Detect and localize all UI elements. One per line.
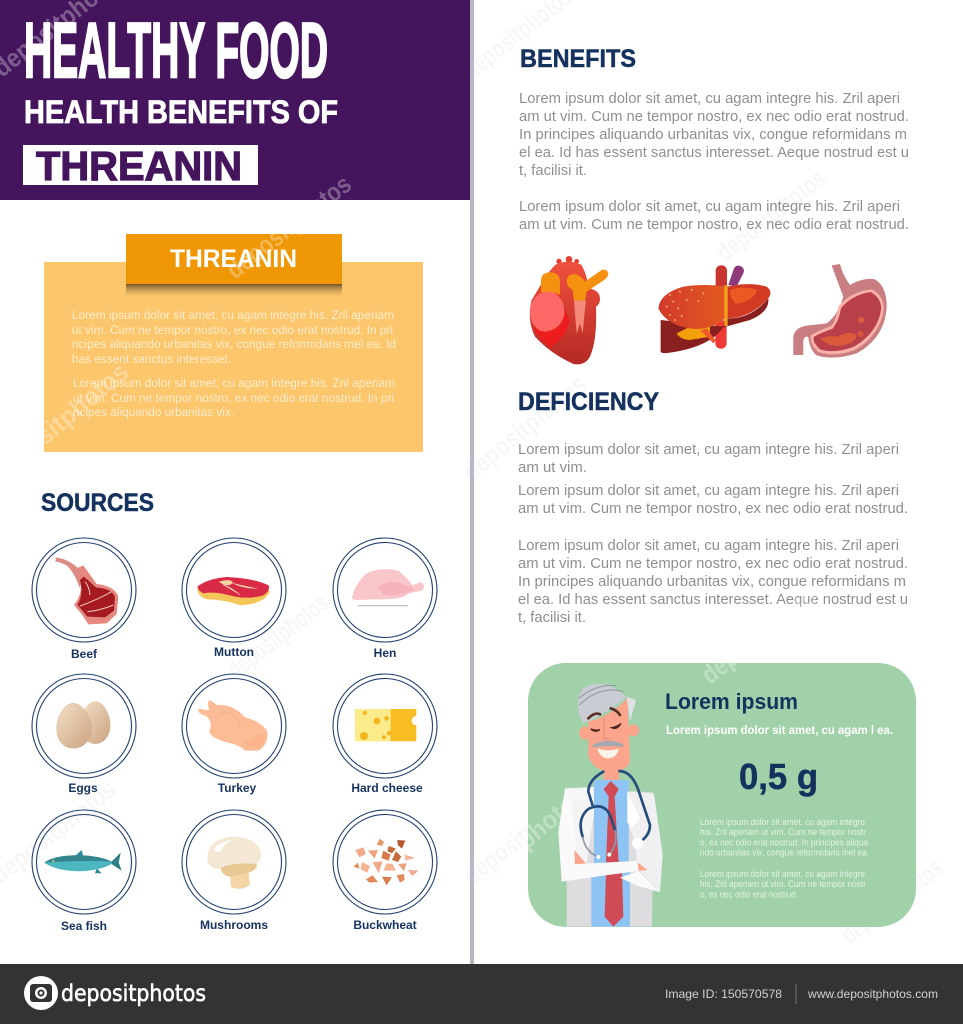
text block: dose paragraph one: Lorem ipsum dolor sit amet, cu agam integre	[700, 817, 865, 827]
heading: lorem ipsum: Lorem ipsum	[665, 689, 798, 714]
label: beef: Beef	[71, 647, 98, 661]
organ icons	[530, 256, 887, 364]
panel: threanin description	[0, 169, 423, 489]
icon: heart	[530, 256, 608, 364]
text block: deficiency paragraph three: el ea. Id has essent sanctus interesset. Aeque nostrud est u	[518, 592, 908, 608]
dose value: 0,5 g	[739, 756, 818, 797]
icon: turkey	[198, 700, 267, 751]
heading: sources: SOURCES	[41, 489, 154, 517]
panel: daily dose: itphotos	[500, 781, 592, 865]
label: buckwheat: Buckwheat	[353, 918, 417, 932]
source: mushrooms	[182, 810, 286, 932]
icon: stomach	[793, 264, 887, 358]
icon: eggs	[57, 701, 110, 748]
icon: mutton	[197, 577, 270, 605]
text block: benefits paragraph one: el ea. Id has essent sanctus interesset. Aeque nostrud est u	[519, 145, 909, 161]
text block: second paragraph	[73, 376, 395, 419]
text block: deficiency paragraph three: t, facilisi it.	[518, 610, 586, 626]
text block: deficiency paragraph one	[518, 442, 899, 476]
text block: deficiency paragraph three: am ut vim. Cum ne tempor nostro, ex nec odio erat nostrud.	[518, 556, 908, 572]
text block: benefits paragraph one	[519, 91, 909, 179]
label: mutton: Mutton	[214, 645, 254, 659]
icon: mushrooms	[207, 837, 261, 889]
label: hen: Hen	[374, 646, 396, 660]
text block: deficiency paragraph two: am ut vim. Cum ne tempor nostro, ex nec odio erat nostrud.	[518, 501, 908, 517]
source: hard cheese	[333, 674, 437, 795]
tab shadow	[126, 284, 342, 297]
icon: hen	[352, 569, 424, 606]
footer logo	[24, 976, 206, 1010]
source: turkey	[182, 674, 286, 795]
icon: buckwheat	[353, 839, 419, 885]
label: turkey: Turkey	[218, 781, 257, 795]
text block: deficiency paragraph one: am ut vim.	[518, 460, 587, 476]
source: buckwheat	[333, 810, 437, 932]
text block: deficiency paragraph three: In principes aliquando urbanitas vix, congue reformidans m	[518, 574, 906, 590]
text block: dose paragraph one: his. Zril aperiam ut vim. Cum ne tempor nostr	[700, 827, 866, 837]
subtitle: health benefits of: HEALTH BENEFITS OF	[24, 94, 338, 130]
text block: dose paragraph two	[700, 869, 866, 900]
center divider	[470, 0, 474, 964]
panel: food sources grid	[32, 538, 437, 933]
text block: second paragraph: Lorem ipsum dolor sit amet, cu agam integre his. Zril aperiam	[73, 376, 395, 390]
heading: benefits: BENEFITS	[520, 45, 636, 73]
text block: second paragraph: ncipes aliquando urbanitas vix.	[73, 405, 234, 419]
icon: hard cheese	[355, 709, 416, 741]
title badge: threanin: THREANIN	[36, 143, 242, 189]
tab heading: threanin	[126, 234, 342, 284]
header panel	[0, 0, 470, 200]
watermark: repeated stock text on white: depositphotos	[221, 587, 334, 685]
panel: daily dose: depositphotos	[695, 574, 832, 690]
source: sea fish	[32, 810, 136, 933]
panel: threanin description: depositphotos	[220, 169, 357, 285]
text block: benefits paragraph one: Lorem ipsum dolor sit amet, cu agam integre his. Zril aperi	[519, 91, 900, 107]
text block: first paragraph	[72, 308, 396, 366]
source: mutton	[182, 538, 286, 659]
text block: deficiency paragraph three: Lorem ipsum dolor sit amet, cu agam integre his. Zril aperi	[518, 538, 899, 554]
text block: first paragraph: ut vim. Cum ne tempor nostro, ex nec odio erat nostrud. In pri	[72, 323, 393, 337]
text block: first paragraph: ncipes aliquando urbanitas vix, congue reformidans mel ea. Id	[72, 337, 396, 351]
heading: deficiency: DEFICIENCY	[518, 388, 659, 416]
watermark: repeated stock text on white: depositphotos	[457, 369, 592, 487]
icon: beef	[55, 557, 118, 624]
text block: benefits paragraph two: am ut vim. Cum ne tempor nostro, ex nec odio erat nostrud.	[519, 217, 909, 233]
label: hard cheese: Hard cheese	[351, 781, 423, 795]
text block: dose paragraph two: Lorem ipsum dolor sit amet, cu agam integre	[700, 869, 865, 879]
source: eggs	[32, 674, 136, 795]
watermark: repeated stock text on white: depositphotos	[458, 782, 587, 890]
icon: camera	[24, 976, 58, 1010]
tab heading: threanin: THREANIN	[170, 245, 297, 273]
subheading: Lorem ipsum dolor sit amet, cu agam l ea.	[666, 725, 893, 737]
label: sea fish: Sea fish	[61, 919, 107, 933]
source: hen	[333, 538, 437, 660]
footer image id: Image ID: 150570578	[665, 987, 782, 1001]
icon: liver	[658, 265, 770, 353]
footer logo: depositphotos	[61, 981, 206, 1007]
text block: benefits paragraph two: Lorem ipsum dolor sit amet, cu agam integre his. Zril aperi	[519, 199, 900, 215]
text block: dose paragraph one: ndo urbanitas vix, congue reformidans mel ea.	[700, 848, 869, 858]
text block: dose paragraph one	[700, 817, 869, 858]
text block: deficiency paragraph two	[518, 483, 908, 517]
text block: benefits paragraph one: In principes aliquando urbanitas vix, congue reformidans m	[519, 127, 907, 143]
text block: dose paragraph two: o, ex nec odio erat nostrud.	[700, 890, 798, 900]
watermark: repeated stock text on white: depositphotos	[710, 163, 831, 267]
label: eggs: Eggs	[68, 781, 98, 795]
text block: deficiency paragraph three	[518, 538, 908, 626]
text block: first paragraph: has essent sanctus interesset.	[72, 352, 231, 366]
text block: benefits paragraph one: am ut vim. Cum ne tempor nostro, ex nec odio erat nostrud.	[519, 109, 909, 125]
text block: first paragraph: Lorem ipsum dolor sit amet, cu agam integre his. Zril aperiam	[72, 308, 394, 322]
text block: second paragraph: ut vim. Cum ne tempor nostro, ex nec odio erat nostrud. In pri	[73, 391, 394, 405]
panel: daily dose	[528, 584, 916, 927]
footer bar	[0, 964, 963, 1024]
text block: dose paragraph two: his. Zril aperiam ut vim. Cum ne tempor nostr	[700, 879, 866, 889]
text block: benefits paragraph two	[519, 199, 909, 233]
footer website: www.depositphotos.com	[807, 987, 938, 1001]
source: beef	[32, 538, 136, 661]
text block: dose paragraph one: o, ex nec odio erat nostrud. In principes aliqua	[700, 838, 869, 848]
text block: benefits paragraph one: t, facilisi it.	[519, 163, 587, 179]
text block: deficiency paragraph two: Lorem ipsum dolor sit amet, cu agam integre his. Zril aperi	[518, 483, 899, 499]
illustration: doctor	[558, 684, 663, 932]
icon: sea fish	[44, 850, 122, 873]
label: mushrooms: Mushrooms	[200, 918, 268, 932]
text block: deficiency paragraph one: Lorem ipsum dolor sit amet, cu agam integre his. Zril aperi	[518, 442, 899, 458]
header panel: HEALTHY FOOD	[24, 6, 328, 94]
